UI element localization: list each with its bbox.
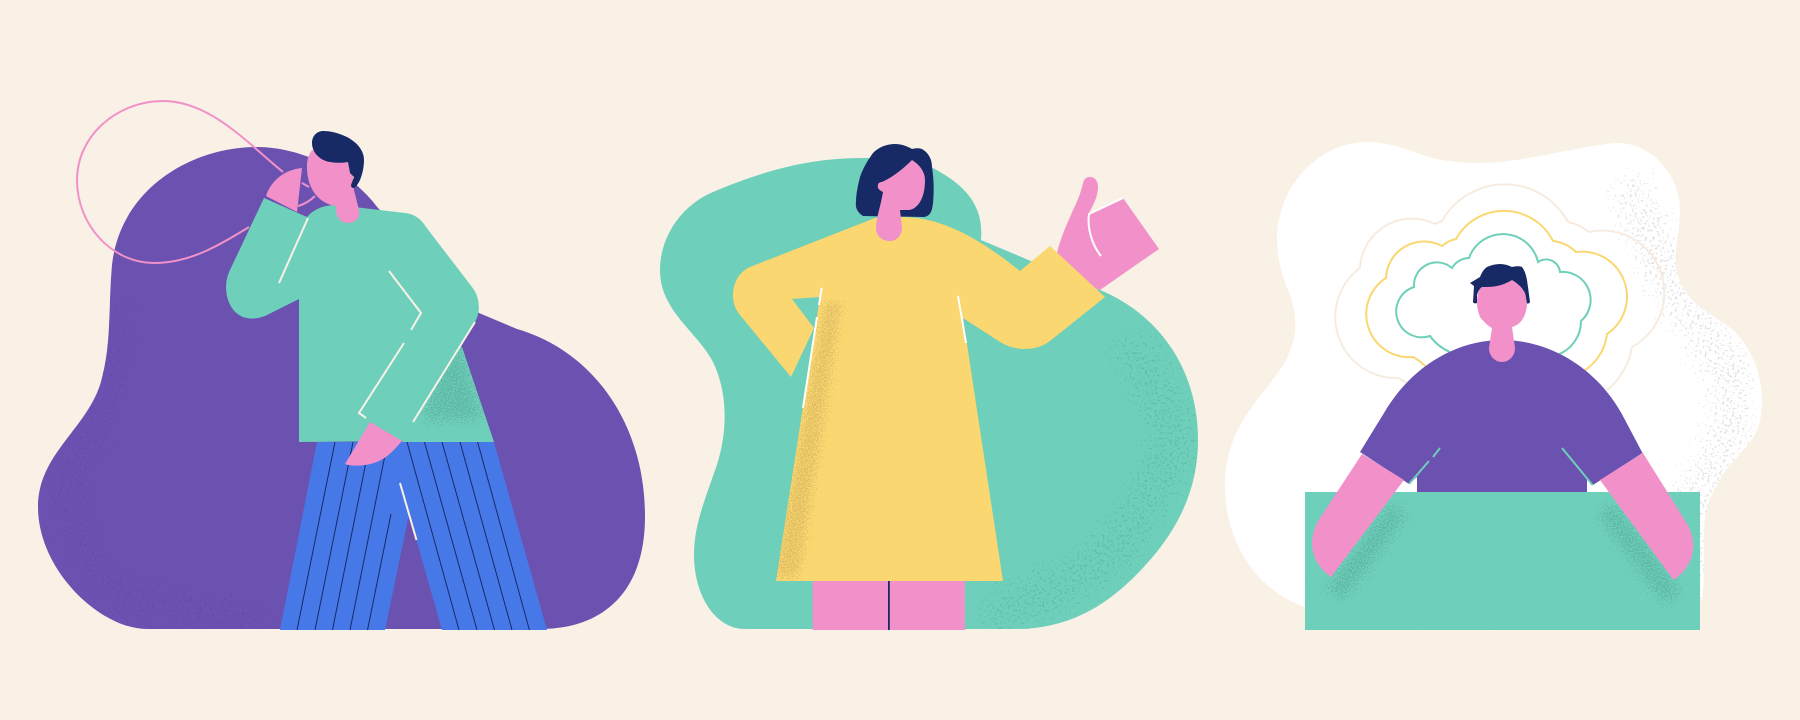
trouser stripes: [297, 442, 529, 630]
man's hair: [312, 131, 364, 188]
neck and face: [307, 150, 359, 223]
panel: woman with thumbs up: [660, 144, 1198, 630]
dress fold lines: [803, 288, 966, 408]
arm shadows on rectangle: [1332, 505, 1676, 602]
sweater fold lines: [279, 218, 475, 422]
hand on hip: [345, 422, 402, 466]
left pink forearm: [1312, 454, 1404, 577]
hair back: [856, 144, 934, 217]
sweater and arms: [226, 198, 479, 442]
pink telephone cord: [77, 101, 315, 263]
purple sweater: [1360, 340, 1642, 492]
right pink forearm: [1600, 453, 1693, 580]
trousers: [280, 442, 547, 630]
legs: [813, 581, 965, 630]
purple blob grain: [48, 299, 128, 626]
torso shadow: [415, 335, 490, 425]
teal blob backdrop: [660, 158, 1198, 629]
dress shadow: [770, 297, 846, 581]
purple blob backdrop: [38, 147, 645, 629]
panel: person with thought clouds: [1225, 142, 1762, 630]
leg gap: [888, 581, 890, 630]
outer cream cloud: [1335, 184, 1664, 390]
raised hand: [266, 168, 302, 212]
sweater teal lines: [1409, 448, 1592, 485]
teal cloud: [1396, 234, 1591, 355]
white blob backdrop: [1225, 142, 1762, 607]
yellow dress: [733, 217, 1105, 581]
torso lower right: [402, 340, 494, 442]
person's hair: [1470, 264, 1530, 304]
white blob grain: [1625, 160, 1730, 620]
neck and face: [1477, 272, 1527, 362]
teal blob grain: [965, 320, 1180, 625]
teal rectangle: [1305, 492, 1700, 630]
face and neck: [876, 160, 925, 241]
yellow cloud: [1366, 211, 1627, 372]
thumb crease: [1089, 198, 1123, 256]
panel: man on the phone: [38, 101, 645, 630]
thumbs-up hand: [1050, 177, 1159, 290]
trouser crease: [400, 483, 416, 540]
